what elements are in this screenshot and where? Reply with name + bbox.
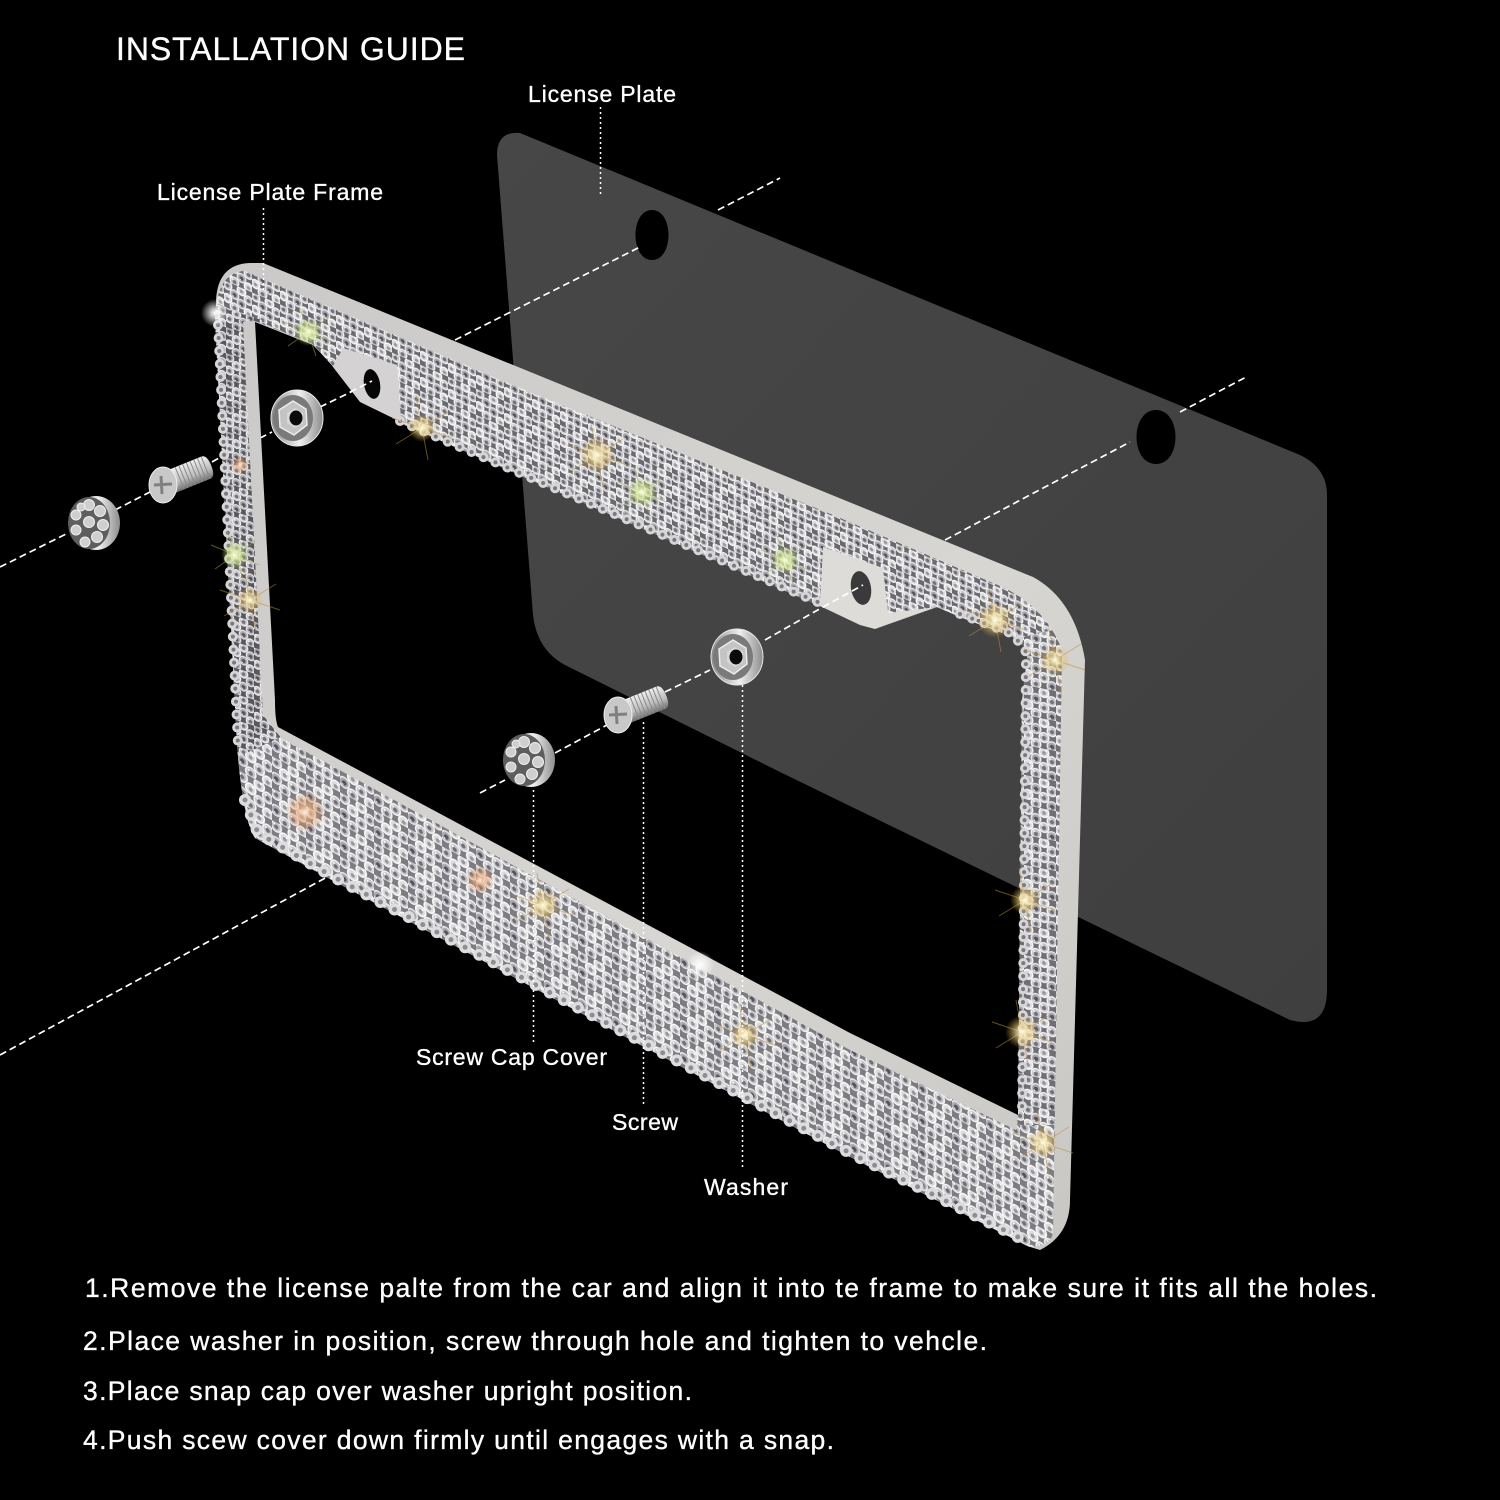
step 3: 3.Place snap cap over washer upright position. bbox=[83, 1376, 692, 1406]
label: washer: Washer bbox=[704, 1174, 788, 1200]
icon: upper screw bbox=[149, 454, 216, 503]
dashed axis line: upper fasteners bbox=[0, 178, 780, 567]
icon: upper screw cap cover bbox=[68, 496, 120, 550]
label: license plate: License Plate bbox=[528, 81, 676, 107]
top right mounting bracket bbox=[820, 547, 937, 629]
dotted leader lines bbox=[264, 107, 742, 1170]
frame metal rim bbox=[216, 263, 1085, 1250]
icon: lower washer bbox=[711, 629, 763, 685]
sparkles on crystals bbox=[201, 299, 1085, 1175]
panel: rhinestone license plate frame bbox=[200, 250, 1100, 1260]
label: screw cap cover: Screw Cap Cover bbox=[416, 1044, 607, 1070]
step 2: 2.Place washer in position, screw through hole and tighten to vehcle. bbox=[83, 1326, 987, 1356]
top left mounting bracket bbox=[333, 348, 401, 422]
title: INSTALLATION GUIDE bbox=[116, 31, 465, 67]
icon: lower screw bbox=[604, 684, 671, 733]
step 1: 1.Remove the license palte from the car and align it into te frame to make sure it fits all the holes. bbox=[85, 1273, 1377, 1303]
scalloped crystal edges bbox=[218, 325, 1030, 1243]
icon: upper washer bbox=[271, 390, 323, 446]
frame rhinestones bbox=[200, 250, 1100, 1260]
label: screw: Screw bbox=[612, 1109, 678, 1135]
dashed axis line: lower fasteners bbox=[0, 376, 1248, 1055]
installation steps bbox=[83, 1273, 1377, 1455]
step 4: 4.Push scew cover down firmly until engages with a snap. bbox=[83, 1425, 834, 1455]
label: license plate frame: License Plate Frame bbox=[157, 179, 383, 205]
icon: lower screw cap cover bbox=[503, 733, 555, 787]
panel: license plate bbox=[497, 133, 1327, 1022]
